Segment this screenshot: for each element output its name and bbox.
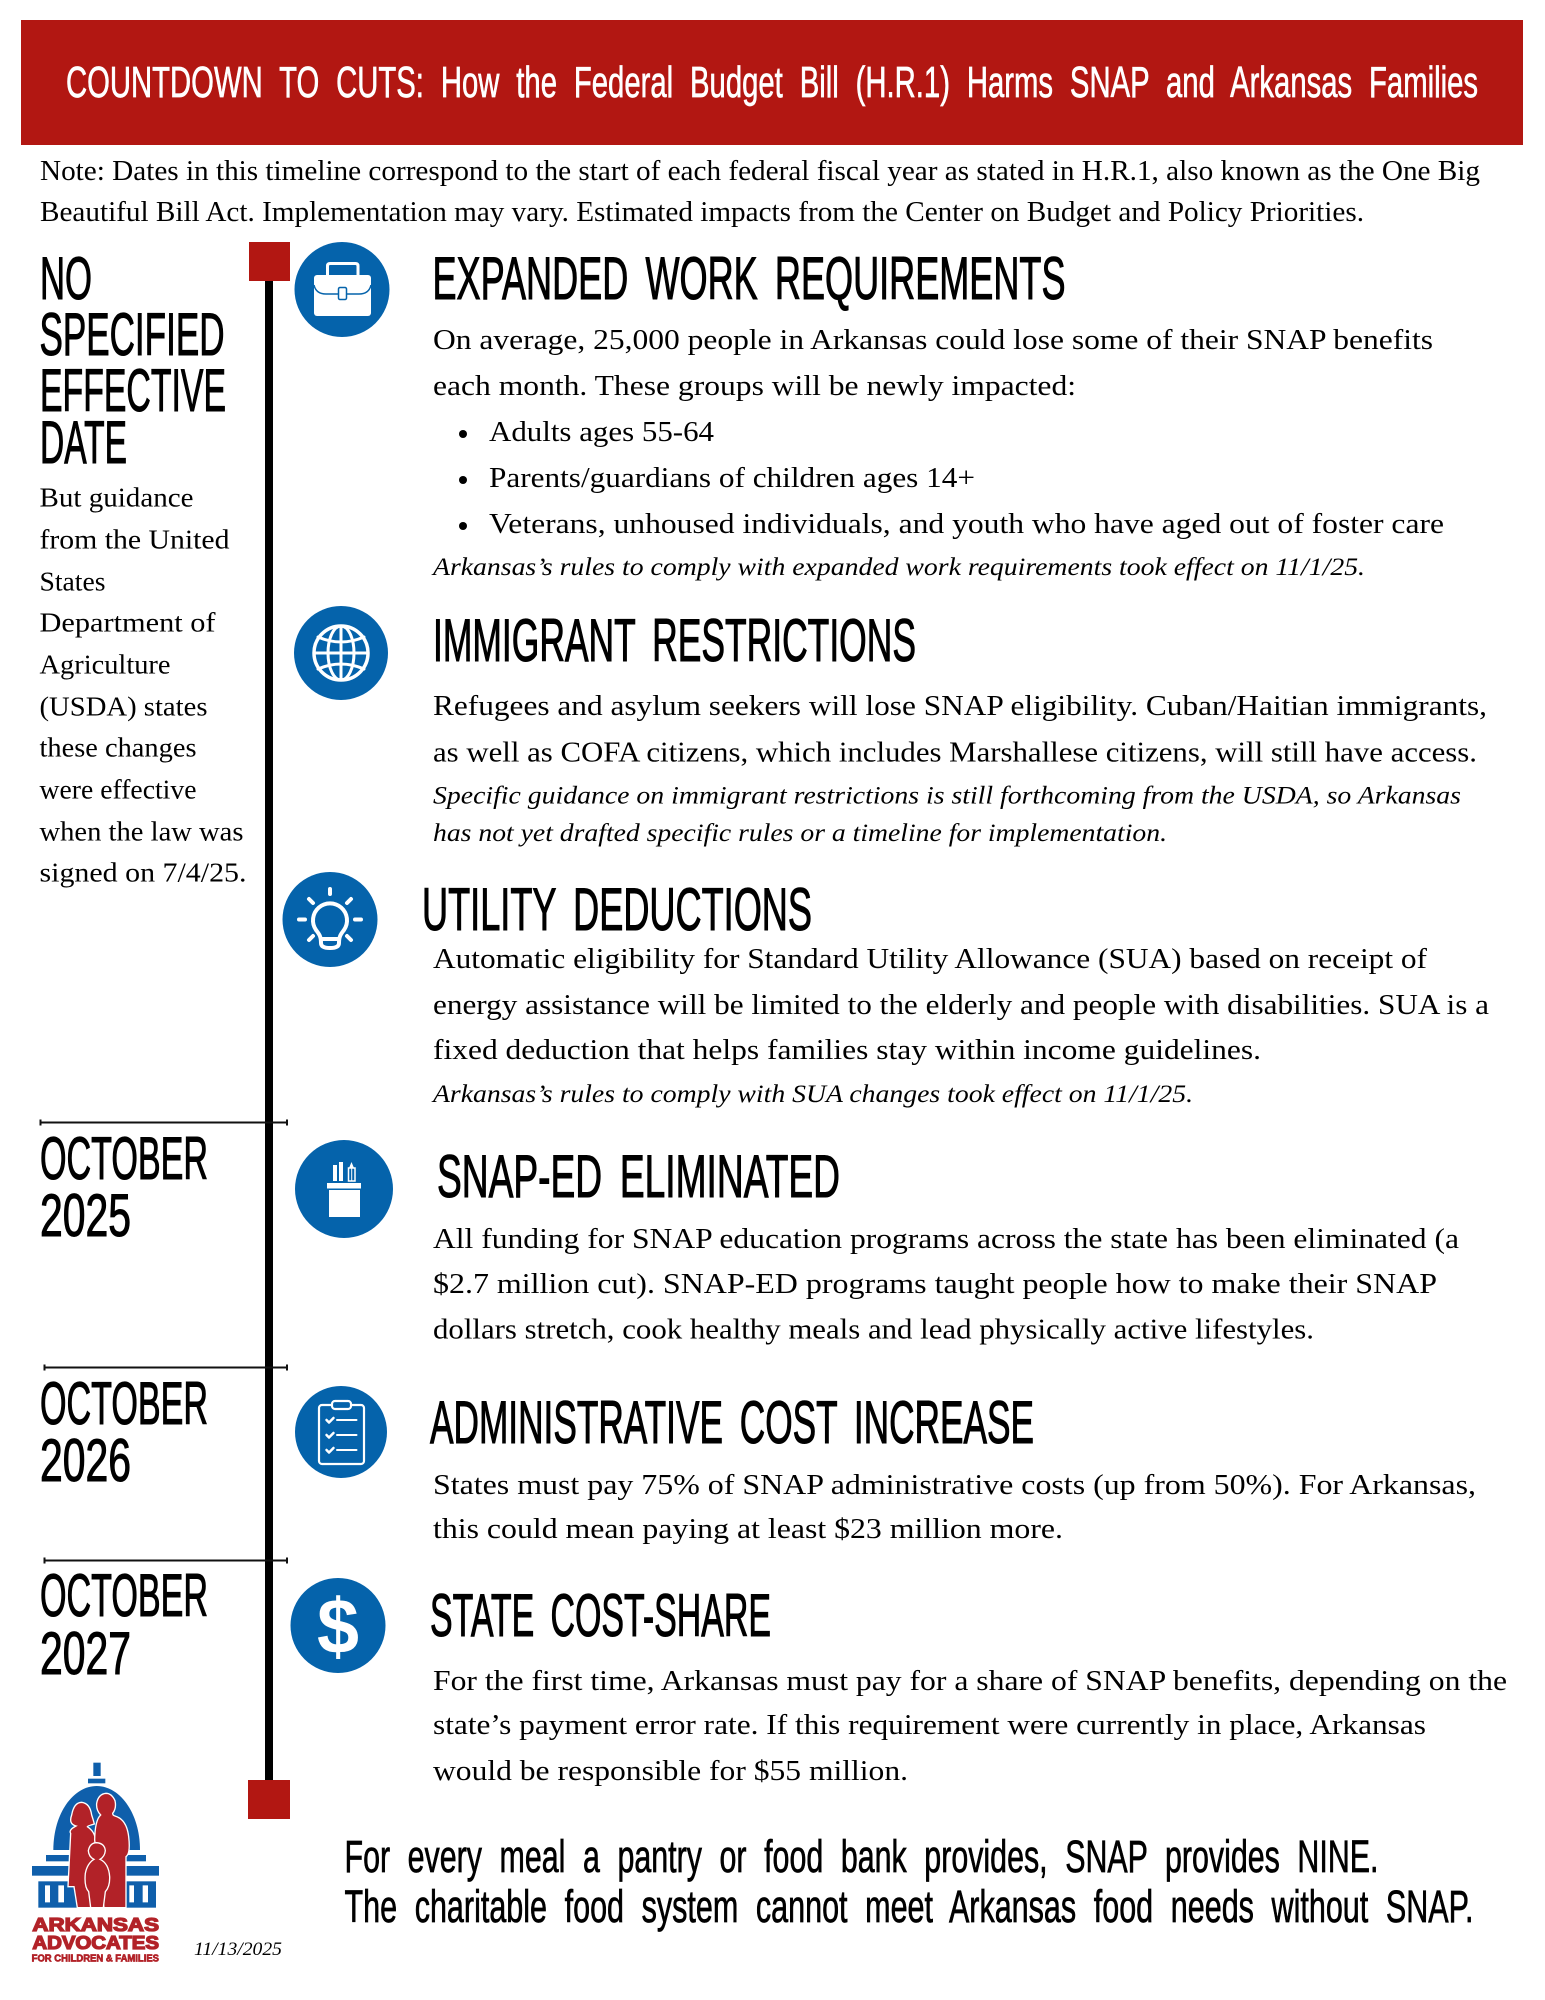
date label: October 2025: 2025 [40, 1182, 131, 1249]
text: USDA guidance: these changes [40, 732, 196, 762]
date label: October 2026: OCTOBER [40, 1370, 208, 1437]
body text: All funding for SNAP education programs across the state has been eliminated (a [433, 1223, 1459, 1255]
text: USDA guidance: (USDA) states [40, 692, 208, 722]
panel: immigrant restrictions [433, 607, 1487, 847]
panel: SNAP-Ed eliminated [433, 1143, 1459, 1346]
date label: no specified effective date: EFFECTIVE [40, 357, 226, 424]
body text: Refugees and asylum seekers will lose SNAP eligibility. Cuban/Haitian immigrants, [433, 690, 1487, 722]
heading: UTILITY DEDUCTIONS [422, 876, 812, 943]
heading: SNAP-ED ELIMINATED [437, 1143, 840, 1210]
panel: utility deductions [422, 876, 1489, 1108]
note text [40, 156, 1480, 228]
body text: On average, 25,000 people in Arkansas could lose some of their SNAP benefits [433, 324, 1433, 356]
bullet list: Adults ages 55-64 [489, 416, 715, 448]
logo: Arkansas Advocates for Children and Families: FOR CHILDREN & FAMILIES [32, 1954, 160, 1965]
text: USDA guidance: But guidance [40, 482, 194, 512]
panel: immigrant restrictions: as well as COFA citizens, which includes Marshallese citizens, will still have access. [433, 736, 1477, 768]
bullet list: Parents/guardians of children ages 14+ [489, 462, 975, 494]
heading: STATE COST-SHARE [430, 1582, 771, 1649]
implementation note: Specific guidance on immigrant restrictions is still forthcoming from the USDA, so Arkansas [433, 782, 1461, 810]
logo: Arkansas Advocates for Children and Families: ADVOCATES [32, 1932, 159, 1953]
logo: Arkansas Advocates for Children and Families: ARKANSAS [32, 1914, 159, 1935]
panel: immigrant restrictions: has not yet drafted specific rules or a timeline for implementation. [433, 820, 1167, 847]
text: USDA guidance: States [40, 566, 106, 596]
panel: state cost-share: would be responsible for $55 million. [433, 1755, 908, 1787]
icon: globe [294, 606, 388, 700]
note text: Beautiful Bill Act. Implementation may vary. Estimated impacts from the Center on Budget and Policy Priorities. [40, 197, 1364, 228]
icon: clipboard checklist [295, 1386, 387, 1478]
panel: SNAP-Ed eliminated: dollars stretch, cook healthy meals and lead physically active lifestyles. [433, 1314, 1314, 1346]
logo: Arkansas Advocates for Children and Families [32, 1763, 160, 1965]
bullet list [459, 416, 1444, 540]
icon: light bulb [282, 872, 378, 967]
date label: October 2025: OCTOBER [40, 1125, 208, 1192]
panel: utility deductions: energy assistance will be limited to the elderly and people with disabilities. SUA is a [433, 989, 1489, 1021]
icon: briefcase [294, 242, 390, 337]
panel: expanded work requirements [431, 245, 1444, 581]
callout: closing statement [344, 1831, 1474, 1932]
text: USDA guidance: signed on 7/4/25. [40, 858, 246, 888]
date label: no specified effective date: NO [40, 245, 92, 312]
heading: EXPANDED WORK REQUIREMENTS [432, 245, 1066, 312]
panel: expanded work requirements: each month. These groups will be newly impacted: [433, 370, 1076, 402]
text: USDA guidance: when the law was [40, 816, 244, 846]
text: USDA guidance: were effective [40, 774, 197, 804]
panel: administrative cost increase [430, 1389, 1476, 1545]
text: USDA guidance: Agriculture [40, 650, 171, 680]
date label: no specified effective date: SPECIFIED [40, 301, 224, 368]
date label: October 2026 [40, 1370, 208, 1494]
bullet list: Veterans, unhoused individuals, and youth who have aged out of foster care [489, 508, 1444, 540]
date label: October 2026: 2026 [40, 1427, 131, 1494]
implementation note: Arkansas’s rules to comply with expanded work requirements took effect on 11/1/25. [431, 554, 1365, 581]
panel: SNAP-Ed eliminated: $2.7 million cut). SNAP-ED programs taught people how to make their SNAP [433, 1268, 1437, 1300]
heading: IMMIGRANT RESTRICTIONS [433, 607, 916, 674]
icon: dollar sign [290, 1578, 386, 1673]
implementation note: Arkansas’s rules to comply with SUA changes took effect on 11/1/25. [431, 1081, 1193, 1108]
text: USDA guidance [40, 482, 246, 888]
body text: Automatic eligibility for Standard Utility Allowance (SUA) based on receipt of [433, 943, 1427, 975]
date label: October 2027 [40, 1562, 208, 1687]
title banner [21, 20, 1523, 145]
body text: States must pay 75% of SNAP administrative costs (up from 50%). For Arkansas, [433, 1469, 1476, 1501]
icon: pencil cup [295, 1140, 393, 1238]
timeline spine [40, 242, 290, 1819]
body text: For the first time, Arkansas must pay for a share of SNAP benefits, depending on the [433, 1665, 1507, 1697]
text: USDA guidance: from the United [40, 524, 230, 554]
date label: no specified effective date: DATE [40, 409, 127, 476]
icon: dollar sign: $ [317, 1582, 359, 1670]
text: USDA guidance: Department of [40, 608, 216, 638]
date label: October 2027: OCTOBER [40, 1562, 208, 1629]
panel: state cost-share: state’s payment error rate. If this requirement were currently in place, Arkansas [433, 1709, 1426, 1741]
panel: utility deductions: fixed deduction that helps families stay within income guidelines. [433, 1034, 1261, 1066]
panel: state cost-share [430, 1582, 1507, 1787]
date label: no specified effective date [40, 245, 226, 476]
note text: Note: Dates in this timeline correspond to the start of each federal fiscal year as stated in H.R.1, also known as the One Big [40, 156, 1480, 187]
date label: October 2027: 2027 [40, 1620, 131, 1687]
heading: ADMINISTRATIVE COST INCREASE [430, 1389, 1034, 1456]
publication date: 11/13/2025 [194, 1939, 282, 1960]
date label: October 2025 [40, 1125, 208, 1249]
panel: administrative cost increase: this could mean paying at least $23 million more. [433, 1513, 1063, 1545]
